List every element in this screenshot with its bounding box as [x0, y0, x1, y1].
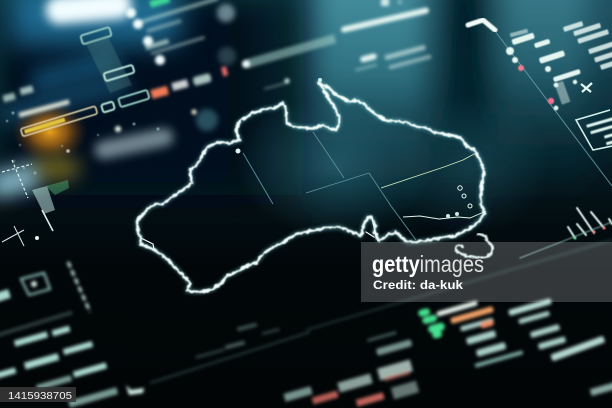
dashboard panel: square icon and text rows, bottom left: [0, 262, 310, 408]
dashboard labels: top left: [2, 0, 336, 132]
watermark: getty images logo: gettyimages: [372, 251, 484, 277]
dashboard panel: top left: [21, 27, 150, 137]
dashboard panel: bottom centre: [283, 240, 612, 407]
decorative dots: upper left: [6, 112, 159, 174]
image id tag: [0, 387, 76, 402]
watermark band: [361, 242, 612, 302]
state border lines: [243, 132, 486, 240]
dashboard panel: top centre bars: [340, 0, 432, 72]
bar chart: right side: [520, 208, 612, 258]
watermark: credit: Credit: da-kuk: [373, 280, 464, 292]
map outline: Tasmania: [456, 235, 492, 258]
image id tag: 1415938705: [8, 391, 72, 402]
map outline: Australia: [137, 78, 485, 292]
dashboard panel: top right with diagonal line: [468, 20, 612, 186]
light flares on the upper left: [0, 0, 236, 200]
dashboard panel: crosshair and grid, left: [2, 160, 69, 246]
